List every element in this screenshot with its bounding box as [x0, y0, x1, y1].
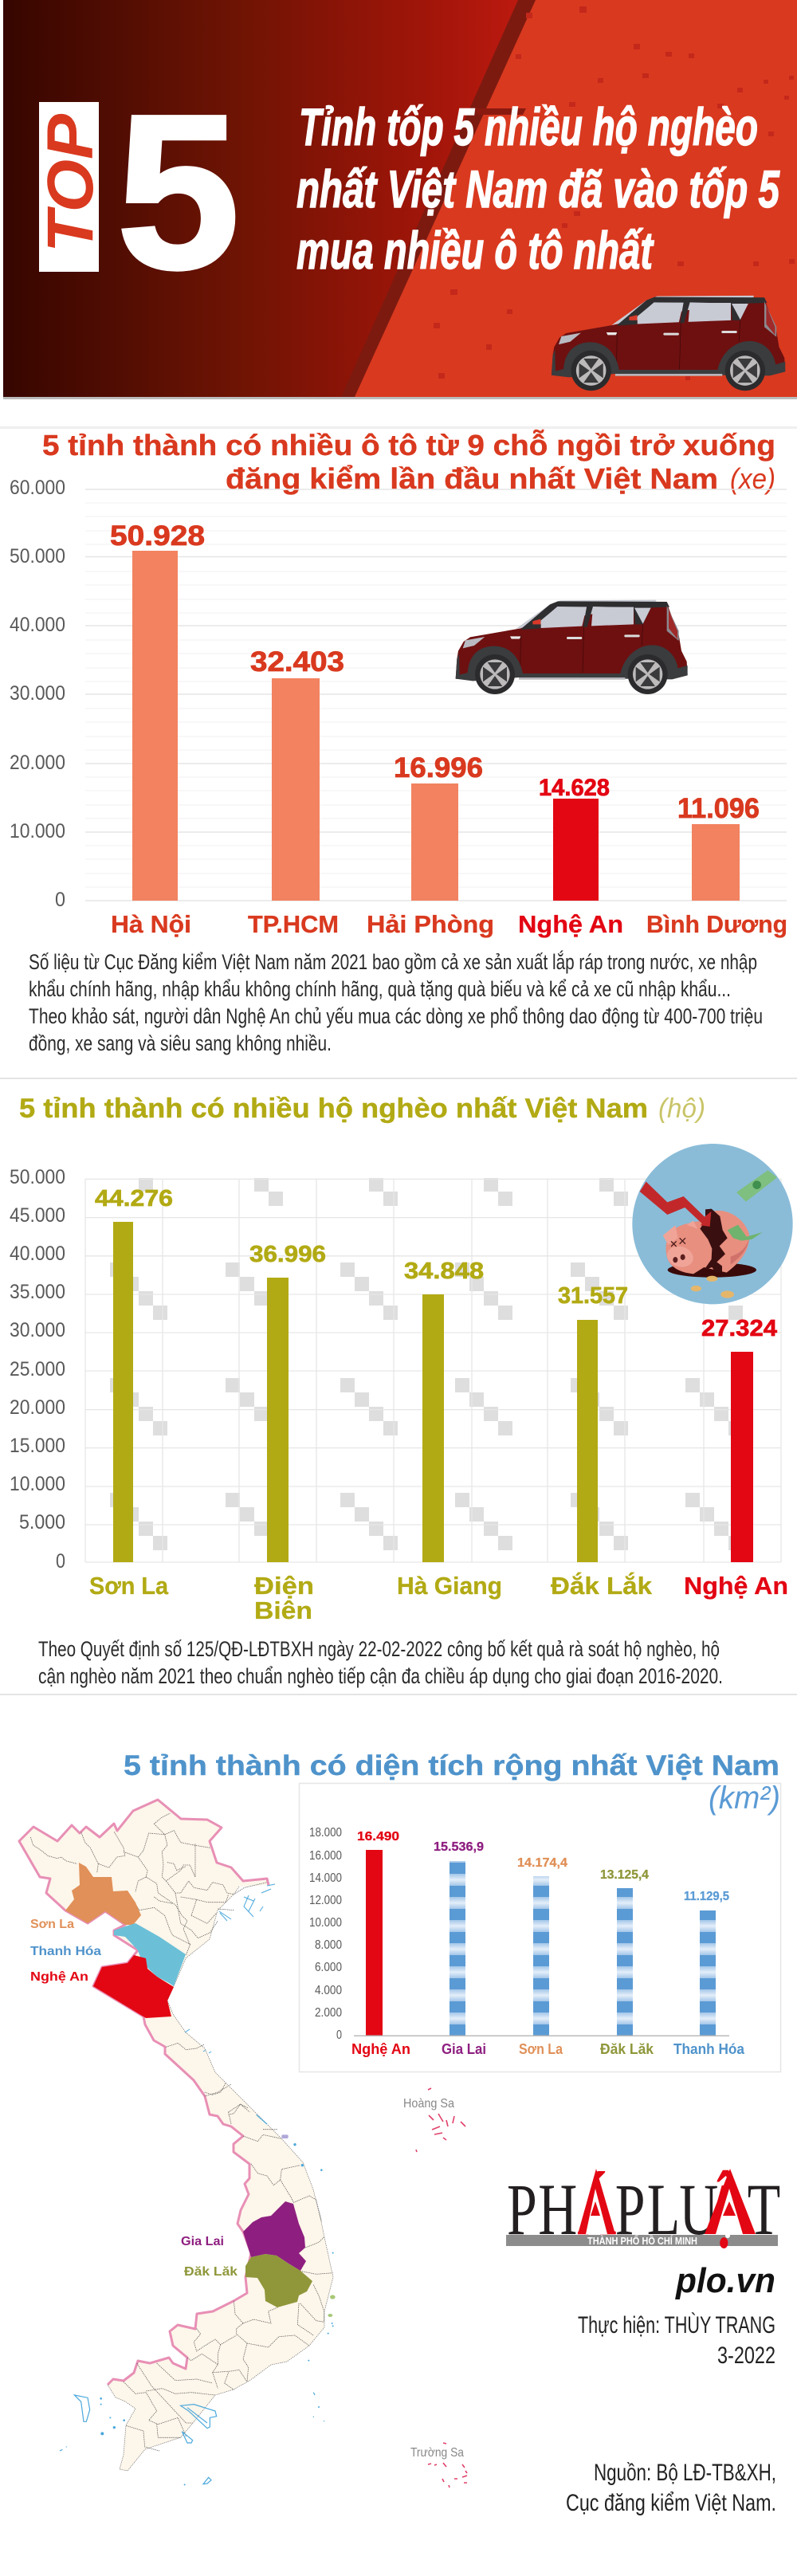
bar chart: cars: 60.000 [10, 477, 65, 499]
bar chart: poor households: 15.000 [10, 1435, 65, 1457]
heading: cars registered: đăng kiểm lần đầu nhất Việt Nam [226, 462, 718, 495]
map labels: Đăk Lăk [184, 2265, 238, 2279]
bar chart: poor households: 44.276 [95, 1186, 173, 1211]
bar chart: cars: 16.996 [394, 752, 483, 783]
islands: Trường Sa: Trường Sa [410, 2446, 464, 2460]
bar chart: poor households: Đắk Lắk [551, 1571, 653, 1600]
header banner [3, 0, 797, 399]
bar chart: area: 14.000 [309, 1871, 342, 1885]
bar chart: cars: 50.928 [110, 520, 205, 552]
bar chart: poor households: 45.000 [10, 1204, 65, 1227]
logo: Pháp Luật: PHÁP LUẬT [507, 2169, 780, 2250]
bar chart: area: 2.000 [315, 2006, 342, 2020]
islands: Hoàng Sa: Hoàng Sa [403, 2097, 454, 2111]
badge: TOP: TOP [34, 114, 107, 253]
bar chart: poor households: 36.996 [249, 1242, 326, 1267]
bar chart: poor households: 5.000 [19, 1511, 65, 1533]
source [566, 2460, 776, 2516]
main title: mua nhiều ô tô nhất [296, 221, 654, 280]
map of Vietnam [19, 1800, 467, 2488]
bar chart: poor households: 20.000 [10, 1396, 65, 1419]
bar chart: cars: 11.096 [677, 793, 760, 824]
map labels: Thanh Hóa [30, 1945, 101, 1958]
heading: cars registered [42, 429, 775, 495]
icon: broken piggy bank [632, 1144, 793, 1304]
bar chart: poor households [10, 1166, 788, 1624]
main title [296, 97, 780, 280]
map labels: Gia Lai [181, 2235, 224, 2248]
bar chart: area: 16.490 [357, 1830, 399, 1844]
bar chart: poor households: 50.000 [10, 1166, 65, 1188]
map labels: Nghệ An [30, 1970, 88, 1984]
bar chart: cars: 40.000 [10, 614, 65, 636]
heading: cars registered: 5 tỉnh thành có nhiều ô tô từ 9 chỗ ngồi trở xuống [42, 429, 775, 461]
credit: 3-2022 [717, 2342, 775, 2369]
bar chart: cars: Bình Dương [646, 910, 787, 938]
bar chart: area: 16.000 [309, 1849, 342, 1863]
bar chart: cars: 14.628 [539, 775, 610, 801]
bar chart: area: 8.000 [315, 1938, 342, 1952]
bar chart: cars: 50.000 [10, 545, 65, 567]
bar chart: cars: 20.000 [10, 752, 65, 774]
islands: Trường Sa [410, 2443, 467, 2488]
bar chart: cars: Hải Phòng [367, 910, 494, 938]
bar chart: area [309, 1826, 745, 2057]
panel: poor households [10, 1094, 793, 1688]
bar chart: cars: Nghệ An [518, 910, 623, 938]
bar chart: area: Thanh Hóa [673, 2041, 745, 2057]
bar chart: cars: 10.000 [10, 820, 65, 842]
heading: largest provinces: 5 tỉnh thành có diện tích rộng nhất Việt Nam [124, 1750, 779, 1781]
map islands [60, 1884, 336, 2485]
text block: poor households note [38, 1637, 723, 1688]
map region: Đắk Lắk [245, 2254, 312, 2307]
panel: area chart [300, 1781, 781, 2072]
bar chart: cars: Hà Nội [111, 910, 191, 938]
bar chart: area: 4.000 [315, 1984, 342, 1997]
big number 5: 5 [116, 69, 240, 315]
text block: cars note [29, 949, 763, 1055]
bar chart: cars [10, 477, 787, 938]
bar chart: area: 13.125,4 [600, 1868, 649, 1882]
map region: Nghệ An [93, 1955, 174, 2018]
bar chart: area: 10.000 [309, 1916, 342, 1930]
map labels: Sơn La [30, 1918, 74, 1931]
heading: cars registered: (xe) [730, 462, 775, 495]
bar chart: area: Nghệ An [351, 2041, 410, 2057]
logo: Pháp Luật: THÀNH PHỐ HỒ CHÍ MINH [587, 2235, 697, 2247]
unit label km2: (km²) [709, 1781, 780, 1816]
bar chart: cars: TP.HCM [248, 910, 339, 938]
icon: car in chart [456, 600, 688, 694]
bar chart: area: Gia Lai [442, 2041, 486, 2057]
bar chart: cars: 30.000 [10, 682, 65, 705]
bar chart: poor households: Sơn La [89, 1572, 169, 1600]
islands: Hoàng Sa [403, 2088, 465, 2152]
bar chart: poor households: 30.000 [10, 1319, 65, 1341]
credit [578, 2312, 775, 2369]
bar chart: poor households: 25.000 [10, 1358, 65, 1380]
bar chart: poor households: 31.557 [558, 1283, 628, 1309]
icon: header car [552, 296, 785, 391]
bar chart: poor households: Nghệ An [684, 1572, 788, 1600]
map region: Sơn La [65, 1863, 141, 1925]
bar chart: area: 6.000 [315, 1961, 342, 1974]
panel: cars registered [10, 429, 787, 1055]
map region: Thanh Hóa [114, 1923, 186, 1986]
bar chart: area: 0 [336, 2028, 342, 2042]
bar chart: area: 14.174,4 [517, 1856, 567, 1870]
bar chart: cars: 0 [55, 889, 65, 911]
bar chart: area: Đăk Lăk [600, 2041, 654, 2057]
bar chart: poor households: 34.848 [404, 1259, 484, 1284]
bar chart: cars: 32.403 [250, 646, 344, 677]
bar chart: poor households: Biên [254, 1596, 312, 1624]
site name: plo.vn: plo.vn [675, 2261, 775, 2300]
heading: poor households: 5 tỉnh thành có nhiều hộ nghèo nhất Việt Nam [19, 1094, 648, 1124]
bar chart: poor households: 10.000 [10, 1473, 65, 1495]
bar chart: poor households: 0 [56, 1550, 65, 1573]
bar chart: area: 11.129,5 [684, 1890, 729, 1903]
map region: Gia Lai [243, 2201, 306, 2271]
bar chart: area: 15.536,9 [434, 1840, 484, 1854]
text block: cars note: đồng, xe sang và siêu sang không nhiều. [29, 1031, 332, 1055]
bar chart: area: 12.000 [309, 1894, 342, 1907]
bar chart: poor households: 27.324 [701, 1316, 777, 1341]
heading: poor households: (hộ) [658, 1094, 705, 1124]
bar chart: poor households: 35.000 [10, 1281, 65, 1303]
bar chart: poor households: Hà Giang [397, 1572, 502, 1600]
bar chart: area: 18.000 [309, 1826, 342, 1840]
bar chart: poor households: Điện [254, 1572, 314, 1600]
map labels [30, 1918, 238, 2279]
bar chart: poor households: 40.000 [10, 1243, 65, 1265]
bar chart: area: Sơn La [519, 2041, 563, 2057]
